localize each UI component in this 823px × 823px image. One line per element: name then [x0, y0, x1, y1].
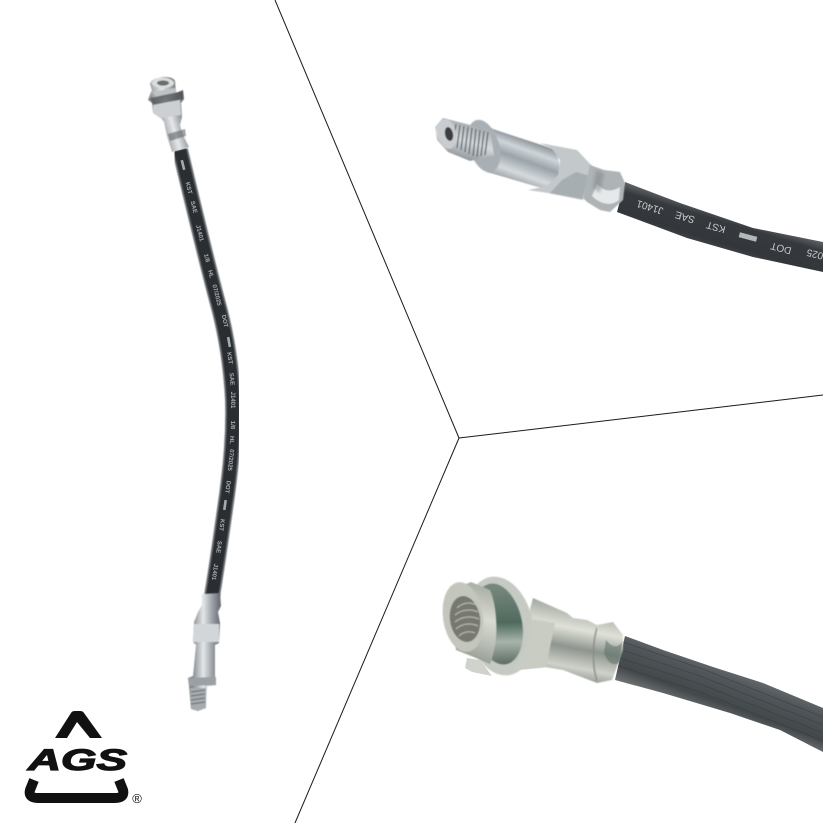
cylinder body — [487, 128, 562, 189]
logo lettering: AGS — [26, 744, 127, 777]
AGS logo — [26, 711, 142, 806]
flange plate — [457, 570, 543, 682]
collar flange — [462, 116, 506, 176]
threaded tip — [435, 117, 494, 161]
full brake hose (left panel) — [148, 77, 235, 711]
hose printed markings: 07/2025 — [226, 449, 234, 472]
divider lines — [275, 0, 823, 823]
threaded bore — [447, 594, 483, 644]
hose printed markings: DOT — [223, 480, 231, 494]
hose printed markings — [181, 160, 235, 581]
hose printed markings: 07/2025 — [210, 284, 222, 307]
detail: threaded male end (top right panel) — [435, 116, 823, 272]
hose printed markings: SAE — [214, 540, 222, 553]
hose printed markings: J1401 — [194, 224, 204, 243]
neck recess — [466, 579, 530, 669]
hose printed text: J1401 — [635, 197, 665, 216]
flange tab — [465, 658, 492, 676]
hose printed markings: KST — [217, 519, 225, 532]
hose printed markings: J1401 — [210, 563, 218, 581]
hose printed markings: HL — [206, 270, 214, 279]
logo top chevron — [55, 711, 102, 738]
hose printed markings: J1401 — [229, 392, 235, 409]
hose segment — [615, 636, 823, 752]
hex nut — [528, 143, 593, 200]
hose printed markings: 1/8 — [229, 421, 235, 430]
crimp collar — [583, 165, 625, 212]
logo bottom tray — [30, 780, 123, 798]
port face — [438, 580, 488, 654]
bottom fitting — [188, 593, 221, 711]
hose printed text: KST — [705, 219, 727, 234]
hose printed text: SAE — [674, 208, 696, 225]
hose segment — [617, 182, 823, 272]
hose printed markings: SAE — [189, 201, 197, 214]
cone and crimp — [513, 598, 623, 683]
hose printed markings: KST — [184, 182, 192, 195]
detail: female flange end (bottom right panel) — [438, 570, 823, 752]
hose printed markings: 1/8 — [202, 253, 210, 264]
registered mark: ® — [132, 791, 142, 806]
top fitting — [148, 77, 189, 152]
hose body — [180, 150, 233, 596]
hose printed markings: SAE — [227, 373, 235, 385]
hose printed markings: KST — [225, 352, 233, 365]
hose printed markings: HL — [228, 436, 234, 444]
hose printed text — [635, 197, 823, 261]
hose printed text: DOT — [770, 239, 793, 256]
hex face — [513, 619, 555, 670]
port body — [452, 582, 496, 664]
hose printed markings: DOT — [220, 314, 228, 328]
hose ribs — [618, 642, 823, 741]
